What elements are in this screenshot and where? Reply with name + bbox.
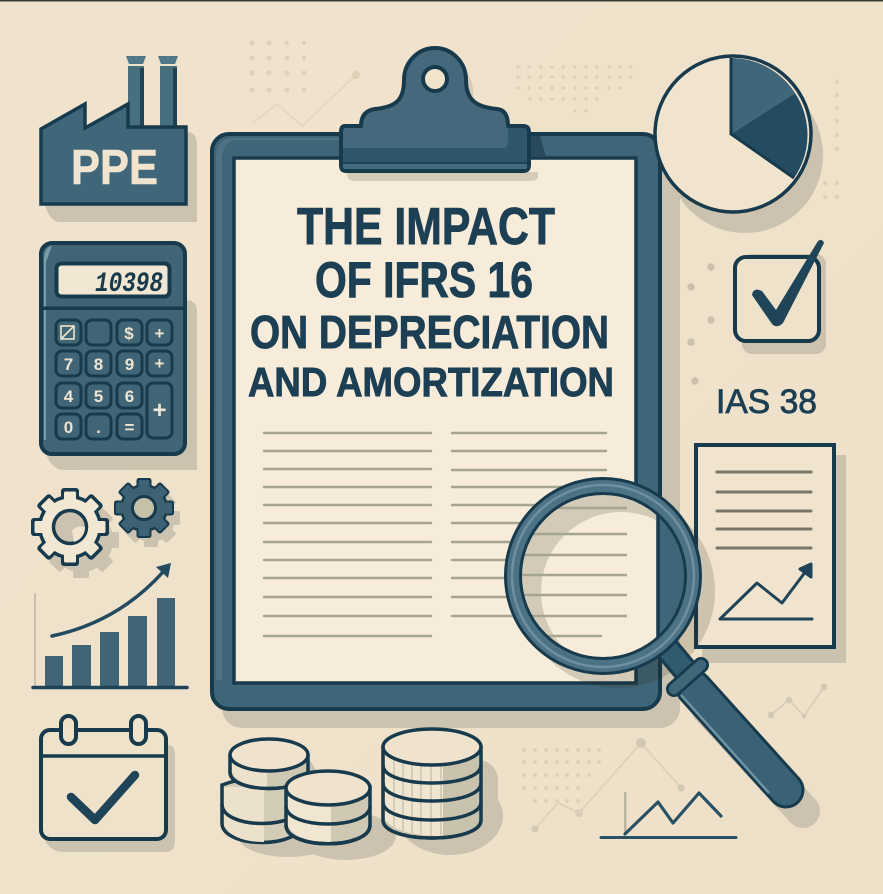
coin stack right [383,729,481,838]
pie slice light [731,58,795,134]
icon: checkbox [735,240,826,354]
title [248,198,614,405]
document text lines [717,472,811,548]
document mini chart [720,564,812,619]
label: IAS 38: IAS 38 [716,383,817,421]
icon: calculator: 4 [64,387,74,406]
icon: calendar [41,716,175,852]
magnifier ring [512,485,694,667]
icon: magnifying glass [512,485,803,811]
icon: coin stacks [222,729,503,860]
title: OF IFRS 16 [315,252,533,308]
icon: calculator: + [155,324,165,343]
icon: calculator: 9 [125,355,134,374]
icon: gears [31,478,180,578]
icon: calculator: 6 [125,387,134,406]
icon: factory PPE [41,56,197,222]
icon: calculator: 0 [64,418,73,437]
panel: clipboard [212,48,680,728]
title: ON DEPRECIATION [250,306,609,358]
calculator display: 10398 [95,269,163,300]
coin stack middle [286,771,370,844]
magnifier lens view [522,495,684,657]
clipboard paper [234,158,636,683]
title: AND AMORTIZATION [248,359,614,405]
icon: calculator: 5 [94,387,103,406]
clipboard text lines [264,433,606,636]
calculator keys [56,320,172,439]
calculator display [56,264,170,300]
icon: calculator: + [155,354,165,373]
background dots and faint lines [249,40,839,833]
gear solid [114,478,180,547]
panel: document with chart [696,445,846,663]
clipboard clip [341,48,529,171]
icon: calculator: 7 [64,355,73,374]
bar chart with trend arrow [33,563,187,688]
gear outline [31,488,119,578]
coin shadows [238,745,503,860]
icon: factory PPE: PPE [71,141,158,195]
icon: calculator: = [125,418,135,437]
icon: small line chart [601,792,736,838]
icon: calculator: 8 [94,355,103,374]
arrow: growth trend [52,563,171,636]
coin stack left [222,739,308,842]
pie slice dark [731,93,808,178]
icon: calculator: $ [124,324,134,343]
magnifier handle [660,640,786,793]
icon: calculator: + [152,397,167,424]
icon: calculator: . [96,418,101,437]
icon: pie chart [655,56,823,233]
icon: calculator [41,243,197,470]
title: THE IMPACT [297,198,555,256]
